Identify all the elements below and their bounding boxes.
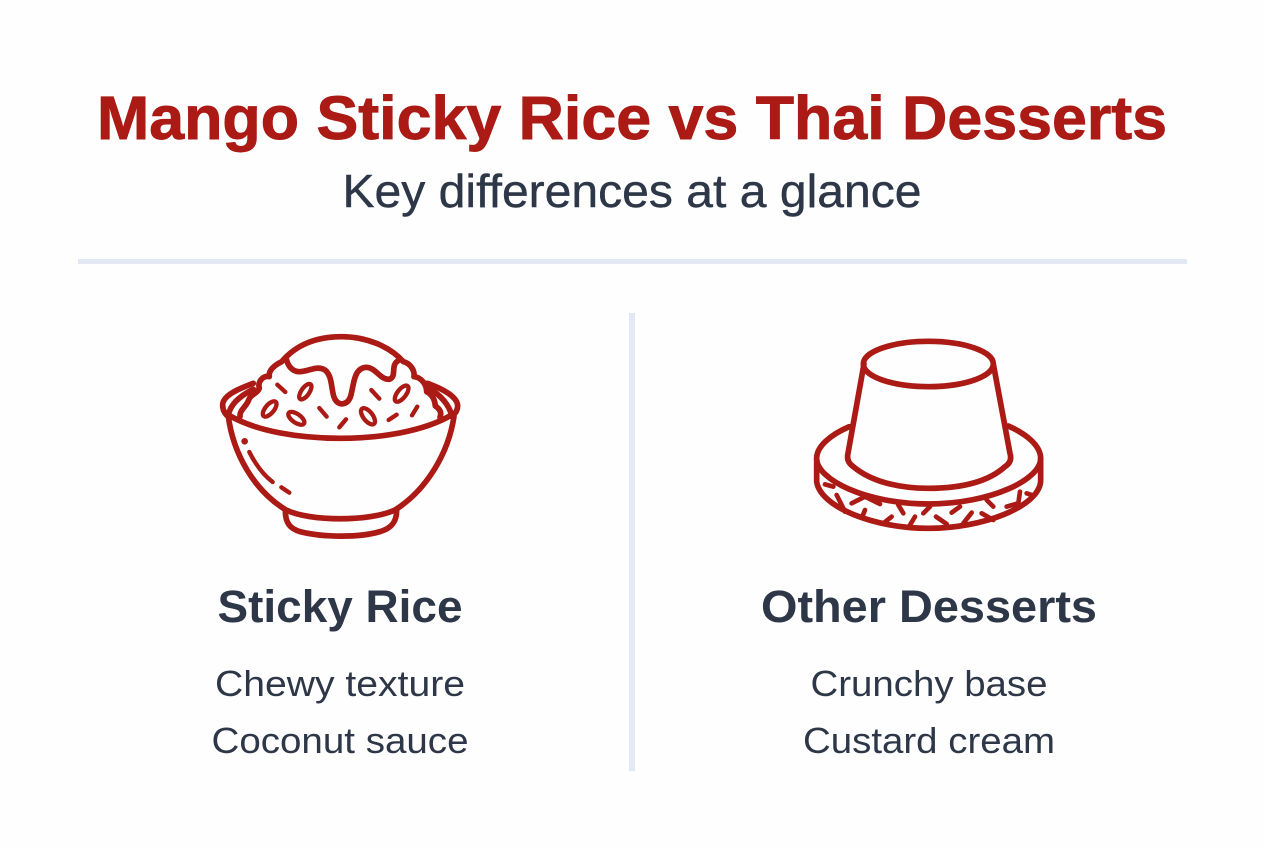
subtitle: Key differences at a glance [342,165,922,217]
text: chewy texture: Chewy texture [215,663,465,704]
panel: sticky rice [212,337,468,761]
panel: other desserts [761,341,1097,761]
text: custard cream: Custard cream [803,720,1055,761]
heading: other desserts: Other Desserts [761,581,1097,632]
text: coconut sauce: Coconut sauce [212,720,468,761]
text: crunchy base: Crunchy base [810,663,1048,704]
heading: sticky rice: Sticky Rice [218,581,462,632]
icon: custard on crunchy base [817,341,1041,528]
icon: rice bowl [223,337,458,536]
title: Mango Sticky Rice vs Thai Desserts [97,84,1167,152]
